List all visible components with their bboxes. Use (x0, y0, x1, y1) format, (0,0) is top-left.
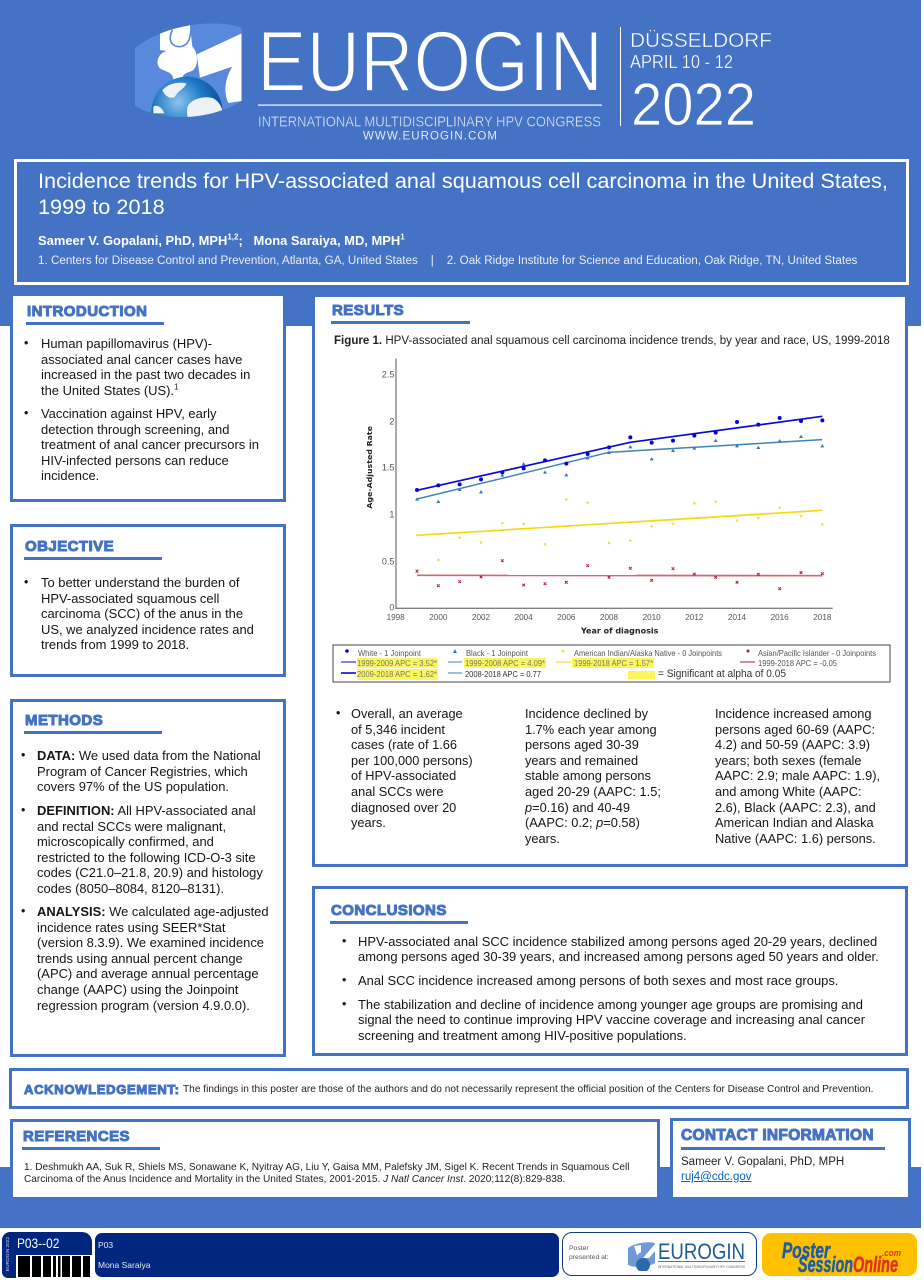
x axis tick labels: 2006 (557, 613, 576, 622)
objective bullet: HPV-associated squamous cell (41, 591, 219, 606)
legend labels (357, 648, 876, 680)
axes (396, 358, 833, 608)
methods: data: Program of Cancer Registries, which (37, 764, 248, 779)
panel: objective (10, 524, 286, 677)
x axis tick labels: 2012 (685, 613, 704, 622)
objective bullet: trends from 1999 to 2018. (41, 637, 189, 652)
y axis tick labels: 1.5 (382, 463, 394, 473)
conclusion bullet 1: • (342, 934, 346, 948)
x axis tick labels: 2018 (813, 613, 832, 622)
results column 2: years and remained (525, 753, 638, 768)
website: WWW.EUROGIN.COM (363, 130, 497, 142)
figure caption: Figure 1. HPV-associated anal squamous cell carcinoma incidence trends, by year and race, US, 1999-2018 (334, 335, 890, 347)
results column 2: 1.7% each year among (525, 722, 657, 737)
results column 1: anal SCCs were (351, 784, 443, 799)
dates: APRIL 10 - 12 (630, 52, 733, 72)
small eurogin logo (628, 1241, 745, 1271)
methods: definition: microscopically confirmed, and (37, 834, 214, 849)
methods: analysis: regression program (version 4.9.0.0). (37, 998, 250, 1013)
results column 1 (336, 706, 473, 830)
methods: definition: restricted to the following ICD-O-3 site (37, 850, 256, 865)
objective bullet: US, we analyzed incidence rates and (41, 622, 254, 637)
intro bullet 2 (24, 406, 259, 483)
footer: presented at tile (562, 1232, 757, 1276)
methods: definition: codes (C21.0–21.8, 20.9) and histology (37, 865, 263, 880)
congress name: INTERNATIONAL MULTIDISCIPLINARY HPV CONGRESS (258, 114, 601, 130)
poster number: P03--02 (17, 1235, 59, 1251)
series: American Indian/Alaska Native (416, 498, 824, 561)
contact name and email: ruj4@cdc.gov (681, 1171, 751, 1183)
presented at label (569, 1245, 609, 1260)
legend labels: 2008-2018 APC = 0.77 (465, 669, 541, 679)
series: Asian/Pacific Islander (416, 559, 824, 590)
line chart: incidence by year and race (365, 358, 833, 636)
panel: conclusions (312, 886, 908, 1056)
x axis tick labels: 2016 (771, 613, 789, 622)
intro bullet 1: Human papillomavirus (HPV)- (41, 336, 212, 351)
poster title: 1999 to 2018 (38, 194, 165, 219)
results column 1: of HPV-associated (351, 768, 456, 783)
legend labels: 1999-2009 APC = 3.52* (357, 658, 438, 668)
contact name and email: Sameer V. Gopalani, PhD, MPH (681, 1156, 844, 1168)
results column 3: Native (AAPC: 1.6) persons. (715, 831, 876, 846)
objective bullet: carcinoma (SCC) of the anus in the (41, 606, 243, 621)
results column 3: and among White (AAPC: (715, 784, 862, 799)
bottom blue background band (0, 1167, 921, 1228)
results column 1: cases (rate of 1.66 (351, 737, 457, 752)
results column 3: persons aged 60-69 (AAPC: (715, 722, 875, 737)
legend labels: Asian/Pacific Islander - 0 Joinpoints (758, 648, 876, 658)
heading: introduction: INTRODUCTION (27, 303, 147, 320)
legend labels: 1999-2008 APC = 4.09* (465, 658, 546, 668)
y axis tick labels: 2 (389, 416, 394, 426)
methods: definition (21, 803, 263, 896)
heading: results: RESULTS (332, 302, 404, 319)
session: P03 (98, 1240, 113, 1250)
conclusion bullet 3: • (342, 996, 346, 1010)
results column 2: p=0.16) and 40-49 (525, 800, 630, 815)
footer: session and presenter tile (95, 1233, 559, 1277)
results column 2: persons aged 30-39 (525, 737, 639, 752)
vertical label: EUROGIN 2022 (6, 1237, 11, 1271)
intro bullet 2: Vaccination against HPV, early (41, 406, 216, 421)
footer: poster session online logo: .com (882, 1248, 901, 1258)
conclusion bullet 3: The stabilization and decline of incidence among younger age groups are promising and (358, 996, 863, 1012)
intro bullet 2: • (24, 406, 28, 420)
x axis tick labels: 2008 (600, 613, 619, 622)
poster title (38, 168, 888, 219)
y axis tick labels: 2.5 (382, 369, 394, 379)
legend markers (341, 649, 755, 673)
heading: objective: OBJECTIVE (25, 538, 114, 555)
icon: figure and globe (135, 24, 242, 118)
heading: contact information: CONTACT INFORMATION (681, 1127, 874, 1144)
chart legend (332, 644, 890, 682)
methods: data: • (21, 748, 25, 762)
intro bullet 1 (24, 336, 250, 398)
legend labels: American Indian/Alaska Native - 0 Joinpoints (574, 648, 722, 658)
methods: analysis: (version 8.3.9). We examined incidence (37, 935, 264, 950)
methods: definition: DEFINITION: All HPV-associated anal (37, 803, 256, 818)
poster title: Incidence trends for HPV-associated anal squamous cell carcinoma in the United States, (38, 168, 888, 193)
results column 1: • (336, 706, 340, 720)
y axis title: Age-Adjusted Rate (365, 426, 374, 509)
intro bullet 2: detection through screening, and (41, 422, 229, 437)
results column 3: years; both sexes (female (715, 753, 862, 768)
results column 1: of 5,346 incident (351, 722, 445, 737)
conclusion bullet 2: • (342, 972, 346, 986)
results column 2: (AAPC: 0.2; p=0.58) (525, 815, 640, 830)
affiliations: 1. Centers for Disease Control and Prevention, Atlanta, GA, United States | 2. Oak Ridge Institute for Science and Education, Oak Ridge, TN, United States (38, 254, 857, 267)
panel: results (312, 294, 908, 867)
results column 1: diagnosed over 20 (351, 800, 456, 815)
x axis tick labels: 2010 (643, 613, 661, 622)
y axis tick labels: 1 (389, 510, 394, 520)
x axis tick labels (387, 613, 832, 622)
presented at label: Poster (569, 1245, 589, 1252)
y axis tick labels (382, 369, 394, 613)
methods: analysis: • (21, 904, 25, 918)
panel: references (10, 1119, 660, 1200)
footer: poster session online logo (762, 1233, 917, 1276)
intro bullet 1: increased in the past two decades in (41, 367, 250, 382)
logo rule (258, 104, 602, 106)
methods: definition: codes (8050–8084, 8120–8131). (37, 881, 224, 896)
acknowledgement text: The findings in this poster are those of the authors and do not necessarily represent the official position of the Centers for Disease Control and Prevention. (183, 1084, 873, 1095)
title panel (14, 159, 909, 285)
objective bullet: To better understand the burden of (41, 575, 240, 590)
presenter: Mona Saraiya (98, 1260, 150, 1270)
y axis tick labels: 0 (389, 603, 394, 613)
intro bullet 2: incidence. (41, 468, 99, 483)
legend labels: White - 1 Joinpoint (358, 648, 422, 658)
year: 2022 (631, 71, 756, 138)
results column 3 (715, 706, 880, 846)
heading: references: REFERENCES (23, 1128, 130, 1145)
legend labels: 2009-2018 APC = 1.62* (357, 669, 438, 679)
top blue background band (0, 0, 921, 326)
methods: definition: • (21, 803, 25, 817)
x axis tick labels: 1998 (387, 613, 405, 622)
series: Black (415, 435, 824, 503)
methods: analysis: ANALYSIS: We calculated age-adjusted (37, 904, 269, 919)
legend labels: 1999-2018 APC = 1.57* (574, 658, 654, 668)
objective bullet: • (24, 575, 28, 589)
city: DÜSSELDORF (630, 29, 772, 52)
significance highlights (357, 658, 655, 680)
barcode (16, 1255, 92, 1278)
conclusion bullet 2: Anal SCC incidence increased among persons of both sexes and most race groups. (358, 972, 838, 988)
reference text: 1. Deshmukh AA, Suk R, Shiels MS, Sonawane K, Nyitray AG, Liu Y, Gaisa MM, Palefsky JM, Sigel K. Recent Trends in Squamous Cell (24, 1162, 630, 1173)
results column 1: Overall, an average (351, 706, 463, 721)
results column 2: years. (525, 831, 560, 846)
results column 3: Incidence increased among (715, 706, 872, 721)
heading: methods: METHODS (25, 712, 103, 729)
legend labels: 1999-2018 APC = -0.05 (758, 658, 837, 668)
results column 3: 2.6), Black (AAPC: 2.3), and (715, 800, 876, 815)
intro bullet 1: the United States (US).1 (41, 382, 178, 398)
panel: contact information (670, 1118, 911, 1200)
acknowledgement heading: ACKNOWLEDGEMENT: (24, 1082, 180, 1097)
methods: data (21, 748, 261, 794)
panel: introduction (10, 293, 286, 502)
methods: analysis: change (AAPC) using the Joinpoint (37, 982, 238, 997)
panel: acknowledgement (9, 1068, 909, 1109)
results column 2: aged 20-29 (AAPC: 1.5; (525, 784, 661, 799)
conclusion bullet 3 (342, 996, 865, 1043)
results column 2 (524, 706, 661, 846)
heading: conclusions: CONCLUSIONS (331, 902, 447, 919)
objective bullet (24, 575, 254, 652)
conclusion bullet 3: signal the need to continue improving HPV vaccine coverage and increasing anal cancer (358, 1012, 865, 1027)
conclusion bullet 1: HPV-associated anal SCC incidence stabilized among persons aged 20-29 years, declined (358, 934, 877, 948)
x axis title: Year of diagnosis (580, 627, 659, 636)
x axis tick labels: 2014 (728, 613, 747, 622)
x axis tick labels: 2000 (429, 613, 448, 622)
footer: poster session online logo: Poster (782, 1238, 831, 1263)
legend labels: Black - 1 Joinpoint (466, 648, 529, 658)
contact name and email (681, 1156, 844, 1183)
methods: analysis (21, 904, 269, 1013)
results column 2: Incidence declined by (525, 706, 648, 721)
header: congress logo and dates (135, 15, 772, 142)
methods: analysis: incidence rates using SEER*Stat (37, 920, 225, 935)
intro bullet 1: • (24, 336, 28, 350)
x axis tick labels: 2002 (472, 613, 491, 622)
methods: definition: and rectal SCCs were malignant, (37, 819, 226, 834)
results column 1: per 100,000 persons) (351, 753, 473, 768)
intro bullet 2: HIV-infected persons can reduce (41, 453, 229, 468)
legend labels: = Significant at alpha of 0.05 (658, 668, 786, 680)
logo wordmark: EUROGIN (257, 15, 603, 110)
panel: methods (10, 699, 286, 1057)
methods: analysis: (APC) and average annual percentage (37, 966, 259, 981)
methods: data: DATA: We used data from the National (37, 748, 261, 763)
conclusion bullet 1 (342, 934, 879, 964)
conclusion bullet 3: screening and treatment among HIV-positive populations. (358, 1028, 687, 1043)
x axis tick labels: 2004 (515, 613, 533, 622)
results column 2: stable among persons (525, 768, 651, 783)
conclusion bullet 1: among persons aged 30-39 years, and increased among persons aged 50 years and older. (358, 949, 879, 964)
reference text (24, 1162, 630, 1185)
y axis tick labels: 0.5 (382, 556, 394, 566)
footer: poster id tile (2, 1232, 92, 1278)
methods: data: covers 97% of the US population. (37, 779, 229, 794)
reference text: Carcinoma of the Anus Incidence and Mortality in the United States, 2001-2015. J Natl Cancer Inst. 2020;112(8):829-838. (24, 1174, 565, 1185)
results column 3: American Indian and Alaska (715, 815, 874, 830)
intro bullet 1: associated anal cancer cases have (41, 352, 242, 367)
authors: Sameer V. Gopalani, PhD, MPH1,2; Mona Saraiya, MD, MPH1 (38, 233, 405, 248)
intro bullet 2: treatment of anal cancer precursors in (41, 437, 259, 452)
results column 3: 4.2) and 50-59 (AAPC: 3.9) (715, 737, 870, 752)
results column 1: years. (351, 815, 386, 830)
results column 3: AAPC: 2.9; male AAPC: 1.9), (715, 768, 880, 783)
header divider (620, 27, 621, 126)
presented at label: presented at: (569, 1254, 609, 1260)
methods: analysis: trends using annual percent change (37, 951, 243, 966)
series: White (415, 416, 824, 492)
